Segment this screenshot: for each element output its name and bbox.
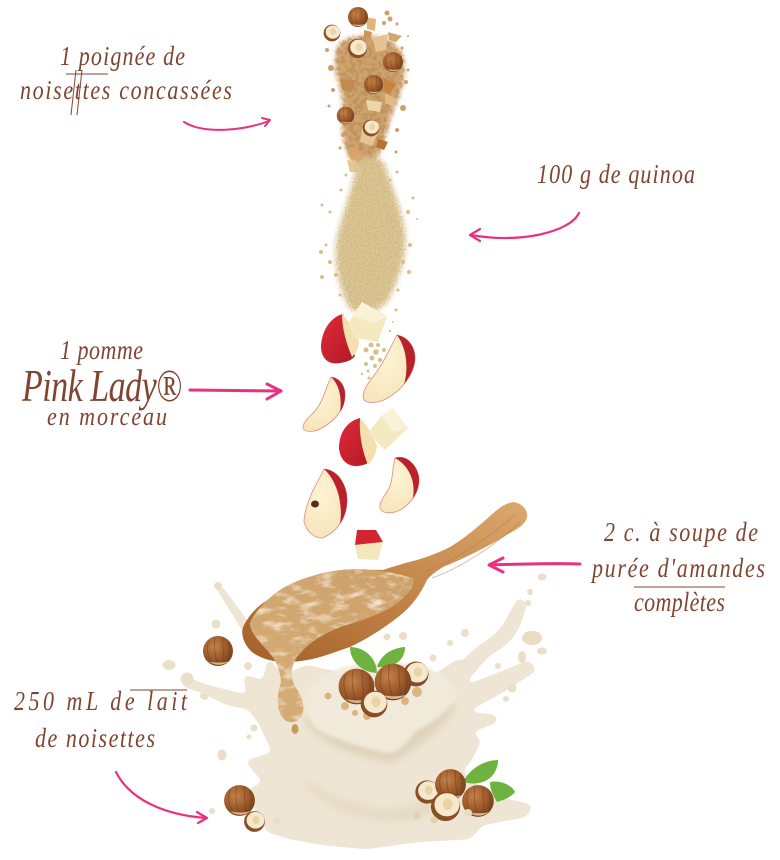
label: apple [21,336,182,432]
label: almond butter [590,518,765,618]
arrow: hazelnut milk [116,772,207,823]
label: hazelnut milk: 250 mL de lait [14,687,188,717]
label: hazelnut milk [14,687,188,754]
arrow: quinoa [470,213,579,241]
label: hazelnut milk: de noisettes [35,724,155,754]
nut butter [250,569,413,722]
whole hazelnut [364,75,383,94]
milk splash [162,574,547,849]
label: almond butter: complètes [634,588,725,618]
hazelnuts bottom left [224,785,265,832]
hazelnuts bottom right [414,769,494,824]
quinoa grain column [336,157,405,313]
label: apple: en morceau [47,402,167,432]
spoon grain [425,515,520,578]
mint leaves bottom [463,760,515,802]
splash dome [303,662,458,753]
milk drops [162,574,547,825]
arrow: almond butter [489,558,580,572]
arrow: apple [190,384,281,399]
label: apple: Pink Lady® [21,360,182,411]
whole hazelnut [348,7,368,27]
ingredient: crushed hazelnuts falling [324,7,410,172]
whole hazelnut [337,107,354,124]
apple slice [380,457,419,513]
label: hazelnuts: 1 poignée de [60,42,185,72]
apple slice [303,377,345,431]
butter drip tip [292,724,298,734]
apple wedge with cube [321,302,387,363]
half hazelnut [363,120,379,136]
label: hazelnuts: noisettes concassées [20,76,232,106]
apple slice large [363,335,415,403]
label: almond butter: 2 c. à soupe de [604,518,758,548]
half hazelnut [324,25,340,41]
ingredient: quinoa stream [319,157,418,380]
label: quinoa: 100 g de quinoa [537,160,695,190]
whole hazelnut [383,52,403,72]
hazelnut floating [203,636,233,666]
half hazelnut top right [404,662,428,686]
crushed hazelnut crumb mass [335,36,404,167]
label: almond butter: purée d'amandes [590,554,765,584]
splash rim shadow [305,700,455,763]
half hazelnut front [361,691,387,717]
crumbs on top [324,686,422,720]
splash crown and pool [183,585,536,849]
hazelnut top right [375,664,411,700]
hazelnuts on top [339,669,374,704]
scattered quinoa grains [319,170,418,380]
splash lower wall shading [300,775,455,821]
apple slice with seed [304,469,347,538]
spoon [242,502,527,662]
apple wedge with cube [339,408,408,466]
arrow: hazelnuts [184,118,270,130]
mint leaves top [350,647,405,673]
half hazelnut [348,39,367,58]
label: apple: 1 pomme [60,336,143,366]
scattered nut crumbs [325,10,410,172]
label: hazelnuts [20,42,232,115]
wooden spoon with nut butter [242,502,527,734]
apple cube small [355,530,383,560]
ingredient: apple pieces [303,302,419,560]
